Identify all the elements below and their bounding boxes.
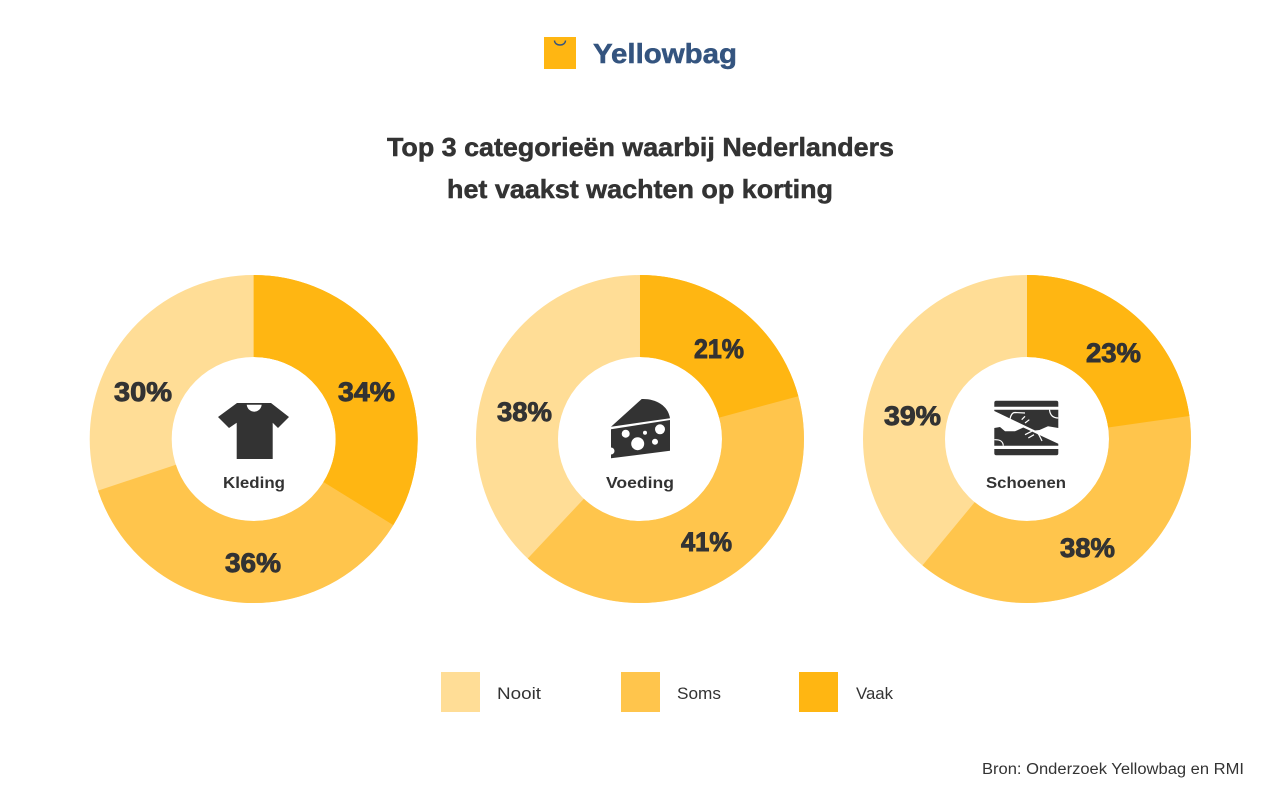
title: Top 3 categorieën waarbij Nederlanders (387, 132, 894, 162)
donut ring: Kleding (131, 316, 377, 562)
icon: yellow shopping bag (544, 37, 576, 69)
donut chart: Kleding (114, 316, 395, 578)
icon: t-shirt (218, 403, 289, 459)
legend (441, 672, 893, 712)
legend item: Soms (621, 672, 721, 712)
value: Soms 41%: 41% (681, 527, 732, 557)
title: het vaakst wachten op korting (447, 174, 833, 204)
category label: Schoenen: Schoenen (986, 475, 1066, 492)
value: Vaak 23%: 23% (1086, 338, 1141, 368)
legend item: Soms: Soms (677, 684, 721, 703)
value: Nooit 30%: 30% (114, 377, 172, 407)
donut ring: Voeding (517, 316, 763, 562)
value: Soms 38%: 38% (1060, 533, 1115, 563)
legend item: Nooit: Nooit (497, 684, 541, 703)
value: Soms 36%: 36% (225, 548, 281, 578)
icon: cheese (611, 399, 670, 458)
legend item: Vaak: Vaak (856, 684, 893, 703)
value: Nooit 38%: 38% (497, 397, 552, 427)
value: Nooit 39%: 39% (884, 401, 941, 431)
donut chart: Voeding (497, 316, 763, 562)
icon: shoes (994, 401, 1058, 455)
legend item: Vaak (799, 672, 893, 712)
logo wordmark: Yellowbag (593, 38, 737, 69)
value: Vaak 21%: 21% (694, 334, 744, 364)
value: Vaak 34%: 34% (338, 377, 395, 407)
title (387, 132, 894, 204)
donut chart: Schoenen (884, 316, 1150, 563)
source note: Bron: Onderzoek Yellowbag en RMI (982, 761, 1244, 778)
legend item: Nooit (441, 672, 541, 712)
category label: Voeding: Voeding (606, 475, 674, 492)
logo: Yellowbag (544, 37, 737, 69)
category label: Kleding: Kleding (223, 475, 285, 492)
donut ring: Schoenen (904, 316, 1150, 562)
